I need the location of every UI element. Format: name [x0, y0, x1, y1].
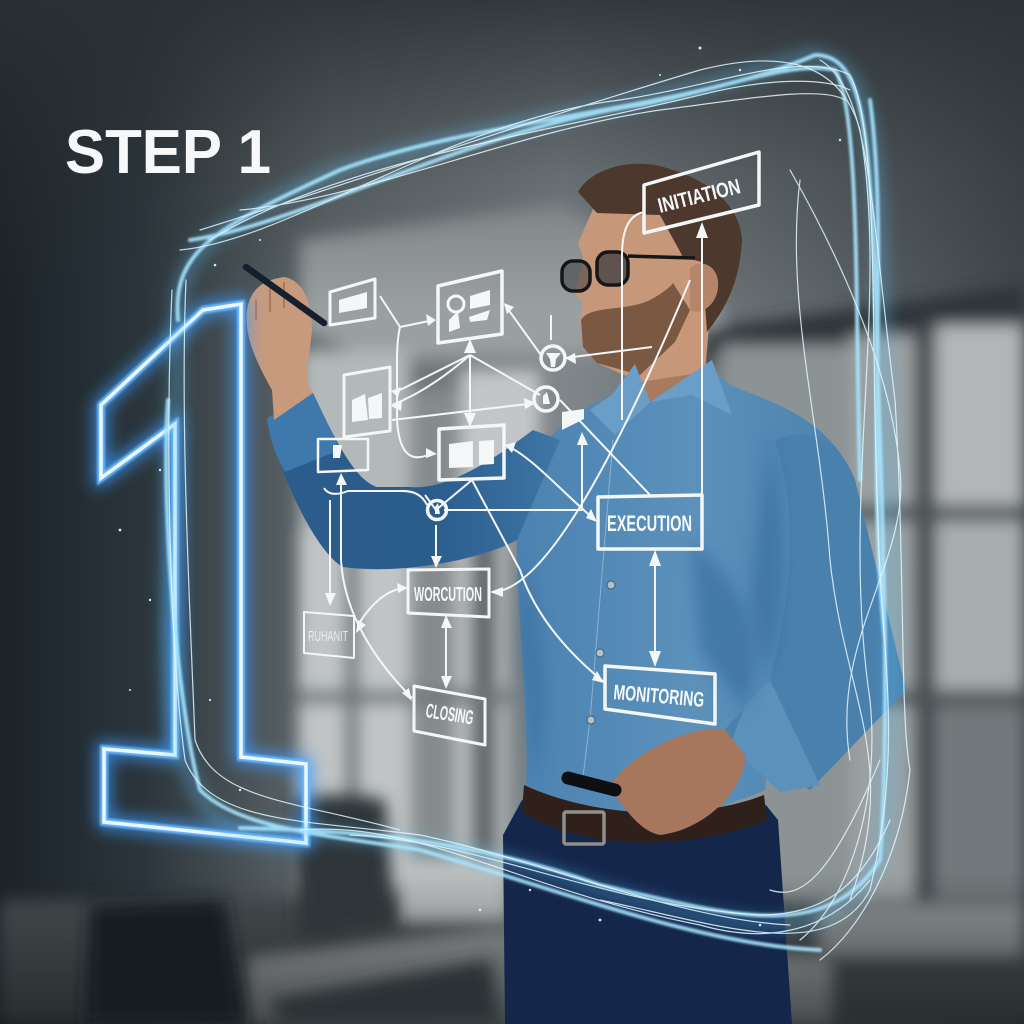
right sleeve [720, 434, 906, 790]
hair [578, 164, 742, 332]
trousers [503, 800, 792, 1024]
energy frame [166, 55, 910, 960]
box: monitoring [605, 666, 715, 724]
box: top left [330, 279, 375, 325]
box: center [439, 425, 504, 480]
shirt sleeve raised arm [268, 393, 560, 569]
box: left small [304, 612, 354, 658]
raised hand [247, 277, 313, 420]
person [246, 164, 906, 1024]
placket and buttons [582, 440, 615, 785]
shirt body [517, 358, 906, 814]
box labels: EXECUTION [607, 511, 692, 536]
pen in hand [246, 267, 324, 323]
box labels: WORCUTION [414, 584, 482, 606]
process diagram [304, 152, 759, 745]
head [575, 197, 715, 382]
ear [690, 264, 718, 312]
collar [590, 360, 732, 435]
box: closing [414, 686, 485, 745]
box: initiation [644, 152, 759, 233]
lower hand and pen [608, 729, 745, 835]
arrowheads [325, 222, 708, 701]
particles [119, 46, 841, 926]
glowing numeral 1 [101, 304, 306, 843]
connector lines [324, 212, 702, 698]
box: top center [438, 271, 502, 343]
beard [581, 283, 690, 375]
title: STEP 1 [65, 118, 271, 187]
glasses [562, 252, 695, 291]
box: small left [318, 439, 368, 472]
box: middle left [344, 367, 390, 437]
belt [522, 785, 767, 843]
box: execution [598, 495, 702, 549]
chairs [85, 795, 500, 1024]
fingers [256, 282, 284, 320]
box labels: CLOSING [424, 700, 475, 729]
shirt shadow folds [520, 430, 783, 780]
cuff [267, 393, 340, 472]
sleeve cuff [730, 680, 820, 792]
box labels: MONITORING [613, 681, 705, 712]
nodes [428, 346, 565, 520]
box: workflow [408, 569, 489, 617]
box labels [308, 175, 743, 729]
neck [625, 330, 705, 402]
box labels: INITIATION [656, 175, 743, 218]
box labels: RUHANIT [308, 628, 348, 645]
